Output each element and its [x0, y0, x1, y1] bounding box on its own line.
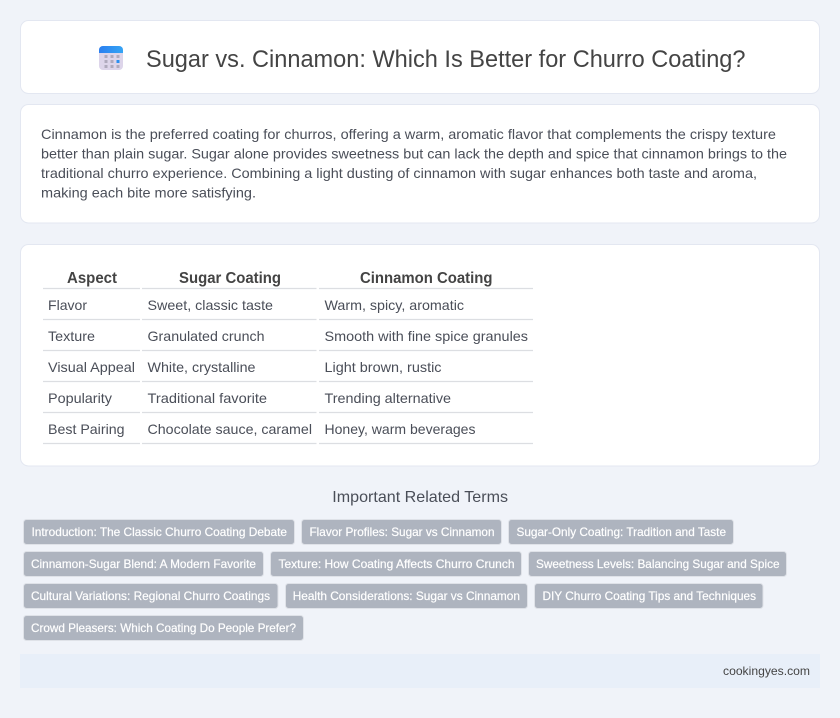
- table header: Sugar Coating: [179, 270, 281, 287]
- tag: Cinnamon-Sugar Blend: A Modern Favorite: [31, 557, 256, 571]
- tag: Health Considerations: Sugar vs Cinnamon: [293, 589, 520, 603]
- table header: Cinnamon Coating: [360, 270, 492, 287]
- footer: cookingyes.com: [723, 664, 810, 678]
- table row: best pairing: Best Pairing: [48, 421, 124, 437]
- table row: popularity: Trending alternative: [324, 390, 451, 406]
- table row: texture: [48, 328, 528, 344]
- table row: best pairing: Chocolate sauce, caramel: [148, 421, 312, 437]
- table header: Aspect: [67, 270, 117, 287]
- table row: texture: Granulated crunch: [148, 328, 264, 344]
- tag: [286, 584, 528, 608]
- tag list: related terms: [24, 520, 786, 640]
- table row: popularity: Traditional favorite: [148, 390, 267, 406]
- text block: introduction paragraph: making each bite more satisfying.: [41, 184, 256, 200]
- table row: visual appeal: Visual Appeal: [48, 359, 135, 375]
- tag: Sugar-Only Coating: Tradition and Taste: [516, 525, 726, 539]
- tag: [24, 520, 294, 544]
- table row: visual appeal: White, crystalline: [148, 359, 256, 375]
- tag: DIY Churro Coating Tips and Techniques: [542, 589, 756, 603]
- table row: flavor: Warm, spicy, aromatic: [324, 297, 464, 313]
- tag: [24, 616, 304, 640]
- tag: Sweetness Levels: Balancing Sugar and Spice: [536, 557, 780, 571]
- table row: texture: Texture: [48, 328, 95, 344]
- tag: [508, 520, 734, 544]
- title: Sugar vs. Cinnamon: Which Is Better for Churro Coating?: [146, 46, 746, 73]
- text block: introduction paragraph: traditional churro experience. Combining a light dusting of cinnamon with sugar enhances both taste and aroma,: [41, 165, 757, 181]
- panel: title header: [20, 20, 820, 94]
- tag: [534, 584, 763, 608]
- table row: texture: Smooth with fine spice granules: [324, 328, 528, 344]
- tag: Crowd Pleasers: Which Coating Do People Prefer?: [31, 621, 296, 635]
- table row: popularity: Popularity: [48, 390, 112, 406]
- tag: Cultural Variations: Regional Churro Coatings: [31, 589, 270, 603]
- tag: Flavor Profiles: Sugar vs Cinnamon: [310, 525, 494, 539]
- tag: [528, 552, 786, 576]
- table row: visual appeal: [48, 359, 442, 375]
- panel: comparison table: [20, 244, 820, 466]
- table row: flavor: Flavor: [48, 297, 87, 313]
- tag: Texture: How Coating Affects Churro Crunch: [278, 557, 514, 571]
- table row: visual appeal: Light brown, rustic: [324, 359, 442, 375]
- table row: best pairing: [48, 421, 476, 437]
- text block: introduction paragraph: Cinnamon is the preferred coating for churros, offering a warm, aromatic flavor that complements the crispy texture: [41, 126, 776, 142]
- text block: introduction paragraph: [41, 126, 787, 200]
- tag: [302, 520, 502, 544]
- table row: flavor: [48, 297, 464, 313]
- text block: introduction paragraph: better than plain sugar. Sugar alone provides sweetness but can lack the depth and spice that cinnamon brings to the: [41, 146, 787, 162]
- tag: [24, 584, 278, 608]
- heading: important related terms: Important Related Terms: [332, 489, 508, 506]
- tag: [24, 552, 264, 576]
- table row: flavor: Sweet, classic taste: [148, 297, 273, 313]
- panel: introduction: [20, 104, 820, 223]
- footer: [20, 654, 820, 688]
- icon: calendar: [99, 46, 123, 70]
- table row: popularity: [48, 390, 451, 406]
- tag: [270, 552, 522, 576]
- tag: Introduction: The Classic Churro Coating Debate: [32, 525, 287, 539]
- table row: best pairing: Honey, warm beverages: [324, 421, 476, 437]
- table header: [67, 270, 492, 287]
